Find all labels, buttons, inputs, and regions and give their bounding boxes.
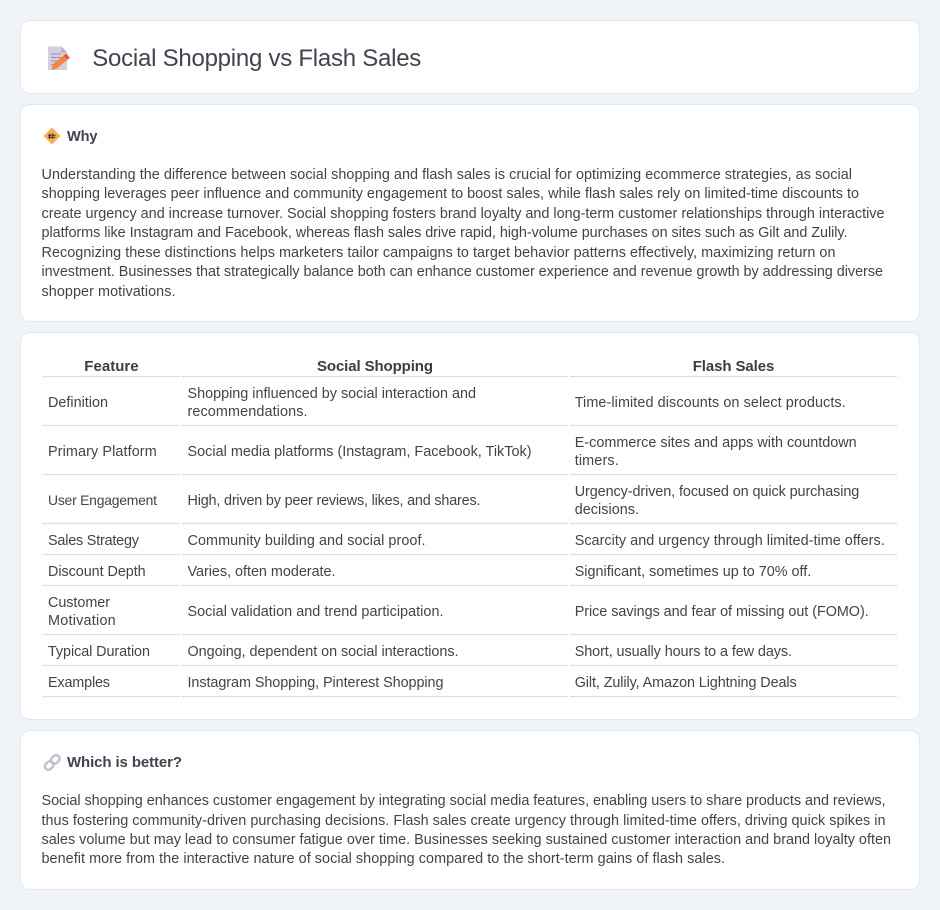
text block: which is better paragraph: benefit more from the interactive nature of social shopping compared to the short-term gains of flash sales. — [42, 851, 725, 867]
row: typical duration: Ongoing, dependent on social interactions. — [188, 644, 458, 660]
row: customer motivation: Motivation — [48, 613, 116, 629]
row: discount depth: Significant, sometimes up to 70% off. — [575, 564, 811, 580]
row: user engagement: User Engagement — [48, 492, 157, 508]
row: user engagement: Urgency-driven, focused on quick purchasing — [575, 484, 859, 500]
text block: which is better paragraph — [42, 793, 891, 867]
row: customer motivation: Price savings and fear of missing out (FOMO). — [575, 604, 869, 620]
row: sales strategy: Sales Strategy — [48, 533, 140, 549]
panel: comparison table — [20, 332, 920, 720]
row: customer motivation: Social validation and trend participation. — [188, 604, 444, 620]
row: primary platform: Social media platforms (Instagram, Facebook, TikTok) — [188, 444, 532, 460]
row: sales strategy: Scarcity and urgency through limited-time offers. — [575, 533, 885, 549]
icon: diamond sign — [44, 128, 60, 144]
panel: which is better — [20, 730, 920, 890]
row: examples: Gilt, Zulily, Amazon Lightning Deals — [575, 675, 797, 691]
row: user engagement: decisions. — [575, 502, 639, 518]
row: sales strategy — [42, 533, 897, 554]
table header row — [42, 358, 897, 376]
icon: document with pencil — [48, 46, 70, 70]
row: definition: recommendations. — [188, 404, 308, 420]
text block: why paragraph: create urgency and increase turnover. Social shopping fosters brand loyalty and long-term customer relationships through interactive — [42, 206, 884, 222]
row: definition: Definition — [48, 395, 108, 411]
table header row: Feature — [84, 358, 139, 375]
row: customer motivation: Customer — [48, 595, 110, 611]
heading: which is better: Which is better? — [67, 754, 182, 771]
icon: chain link — [43, 754, 61, 771]
row: typical duration: Typical Duration — [48, 644, 150, 660]
text block: why paragraph: shopping leverages peer influence and community engagement to boost sales, while flash sales rely on limited-time discounts to — [42, 186, 859, 202]
panel: header — [20, 20, 920, 94]
text block: why paragraph: shopper motivations. — [42, 284, 176, 300]
row: discount depth — [42, 564, 897, 586]
heading: why: Why — [67, 129, 98, 145]
text block: why paragraph: Understanding the difference between social shopping and flash sales is crucial for optimizing ecommerce strategies, as social — [42, 167, 852, 183]
table header row: Social Shopping — [317, 358, 433, 375]
row: primary platform — [42, 435, 897, 474]
text block: which is better paragraph: Social shopping enhances customer engagement by integrating social media features, enabling users to share products and reviews, — [42, 793, 886, 809]
row: customer motivation — [42, 595, 897, 634]
text block: which is better paragraph: sales volume but may lead to consumer fatigue over time. Businesses seeking sustained customer interaction and brand loyalty often — [42, 832, 891, 848]
title: Social Shopping vs Flash Sales — [92, 45, 421, 72]
text block: why paragraph: Recognizing these distinctions helps marketers tailor campaigns to target behavior patterns effectively, maximizing return on — [42, 245, 836, 261]
row: examples — [42, 675, 897, 696]
row: examples: Instagram Shopping, Pinterest Shopping — [188, 675, 444, 691]
row: definition: Shopping influenced by social interaction and — [188, 386, 476, 402]
panel: why — [20, 104, 920, 322]
row: primary platform: timers. — [575, 453, 619, 469]
row: primary platform: E-commerce sites and apps with countdown — [575, 435, 857, 451]
row: primary platform: Primary Platform — [48, 444, 157, 460]
row: sales strategy: Community building and social proof. — [188, 533, 426, 549]
table header row: Flash Sales — [693, 358, 774, 375]
row: user engagement: High, driven by peer reviews, likes, and shares. — [188, 493, 480, 509]
text block: which is better paragraph: thus fostering community-driven purchasing decisions. Flash sales create urgency through limited-time offers, driving quick spikes in — [42, 813, 886, 829]
row: definition — [42, 386, 897, 426]
row: discount depth: Discount Depth — [48, 564, 146, 580]
row: definition: Time-limited discounts on select products. — [575, 395, 846, 411]
text block: why paragraph: platforms like Instagram and Facebook, whereas flash sales drive rapid, high-volume purchases on sites such as Gilt and Zulily. — [42, 225, 848, 241]
text block: why paragraph: investment. Businesses that strategically balance both can enhance customer experience and revenue growth by addressing diverse — [42, 264, 883, 280]
row: examples: Examples — [48, 675, 110, 691]
row: typical duration: Short, usually hours to a few days. — [575, 644, 792, 660]
row: typical duration — [42, 644, 897, 666]
row: discount depth: Varies, often moderate. — [188, 564, 336, 580]
row: user engagement — [42, 484, 897, 524]
text block: why paragraph — [42, 167, 884, 300]
